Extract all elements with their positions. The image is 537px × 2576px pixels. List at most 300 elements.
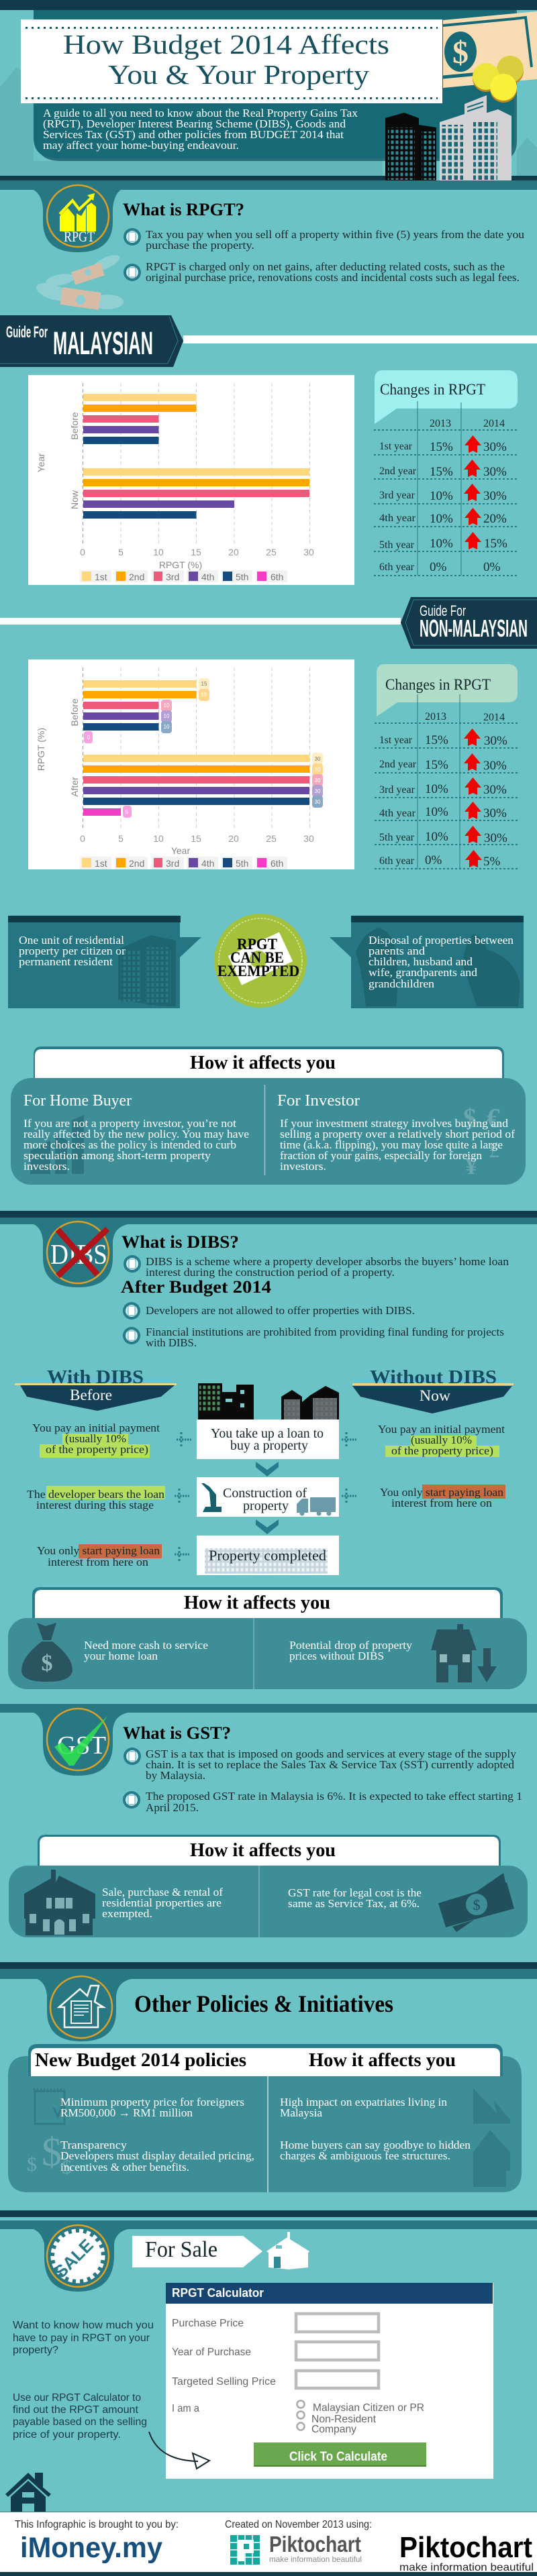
axis labels xyxy=(36,412,314,570)
panel: RPGT calculator: Targeted Selling Price xyxy=(172,2376,276,2387)
panel: how it affects you (GST): How it affects you xyxy=(190,1839,336,1861)
panel: how it affects you (DIBS): prices without DIBS xyxy=(289,1650,384,1662)
table: changes in RPGT (Malaysian): Changes in RPGT xyxy=(380,381,485,398)
panel: RPGT calculator: I am a xyxy=(172,2403,199,2414)
bullet: GST definition: by Malaysia. xyxy=(146,1769,205,1782)
bullet: GST definition: GST is a tax that is imposed on goods and services at every stage of the supply xyxy=(146,1748,517,1760)
title: How Budget 2014 Affects xyxy=(63,29,389,60)
icon: banknotes xyxy=(438,1873,514,1932)
text: developer bears interest xyxy=(27,1486,165,1511)
ribbon: guide for Malaysian: Guide For xyxy=(6,323,48,341)
heading: without DIBS / now: Now xyxy=(420,1387,450,1404)
panel: exemption, family disposal xyxy=(330,916,524,1008)
bullet: net gains: original purchase price, renovations costs and incidental costs such as legal fees. xyxy=(146,271,520,284)
text: investor: selling a property over a relatively short period of xyxy=(280,1128,516,1140)
text: calculator intro: payable based on the selling xyxy=(13,2416,147,2428)
policy rows: Minimum property price for foreigners xyxy=(60,2096,244,2108)
axis labels: 0 xyxy=(80,547,85,557)
axis labels: 5 xyxy=(118,547,124,557)
panel: how it affects you (GST): same as Service Tax, at 6%. xyxy=(288,1897,420,1910)
value tags: before: 10 xyxy=(164,713,170,719)
icon: house with down arrow xyxy=(431,1624,497,1682)
bullet: financial institutions xyxy=(123,1326,504,1349)
axis labels: 15 xyxy=(191,833,201,844)
bullet: net gains: RPGT is charged only on net gains, after deducting related costs, such as the xyxy=(146,260,505,273)
tag: for sale: For Sale xyxy=(145,2237,217,2262)
legend xyxy=(80,857,287,869)
axis labels: Before xyxy=(69,412,80,440)
panel: how it affects you (RPGT): For Investor xyxy=(277,1092,360,1110)
table: changes in RPGT (Malaysian): 15% xyxy=(430,465,453,479)
panel: exemption, family disposal: parents and xyxy=(369,945,426,957)
table: changes in RPGT (non-Malaysian): 10% xyxy=(425,782,448,796)
effect rows: High impact on expatriates living in xyxy=(280,2096,447,2108)
table: changes in RPGT (non-Malaysian): 10% xyxy=(425,805,448,819)
value tags: before: 0 xyxy=(87,735,91,741)
table: changes in RPGT (non-Malaysian): 30% xyxy=(483,806,507,820)
value tags: after xyxy=(123,753,323,818)
value tags: before: 15 xyxy=(201,681,207,687)
panel: RPGT calculator: Purchase Price xyxy=(172,2318,244,2329)
badge: RPGT can be exempted xyxy=(214,914,307,1008)
text: with DIBS initial payment xyxy=(32,1421,160,1458)
badge: DIBS: DIBS xyxy=(50,1240,107,1271)
legend: 4th xyxy=(201,858,214,869)
text: without DIBS start paying: You only start paying loan xyxy=(380,1486,503,1499)
badge: RPGT can be exempted: RPGT xyxy=(237,936,277,953)
panel: how it affects you (GST): Sale, purchase & rental of xyxy=(102,1886,224,1898)
panel: how it affects you (GST): exempted. xyxy=(102,1907,152,1920)
panel: how it affects you (RPGT): £ xyxy=(489,1138,499,1162)
panel: how it affects you (DIBS) xyxy=(8,1587,527,1689)
icon: banknotes: $ xyxy=(473,1896,481,1913)
radio options: Company xyxy=(311,2424,356,2435)
effect rows xyxy=(280,2096,471,2162)
step: take up a loan: You take up a loan to xyxy=(211,1426,324,1441)
text: home buyer: investors. xyxy=(23,1160,70,1173)
text: developer bears interest: The developer bears the loan xyxy=(27,1488,164,1501)
table: changes in RPGT (non-Malaysian): 2nd year xyxy=(379,759,417,770)
text: without DIBS initial payment xyxy=(378,1423,505,1457)
panel: exemption, family disposal: Disposal of properties between xyxy=(369,934,514,947)
illustration: city buildings xyxy=(198,1383,339,1419)
text: calculator intro: property? xyxy=(13,2345,58,2356)
table: changes in RPGT (Malaysian): 10% xyxy=(430,537,453,551)
axis labels: Year xyxy=(171,845,190,856)
table: changes in RPGT (Malaysian) xyxy=(374,370,518,576)
text: home buyer: If you are not a property investor, you’re not xyxy=(23,1117,236,1130)
bars: after xyxy=(83,755,309,816)
heading: what is DIBS: What is DIBS? xyxy=(121,1232,239,1252)
text: home buyer xyxy=(23,1117,249,1173)
bullet: what RPGT is: purchase the property. xyxy=(146,239,254,252)
value tags: after: 30 xyxy=(315,756,321,762)
table: changes in RPGT (Malaysian): 3rd year xyxy=(379,490,416,501)
illustration: black towers xyxy=(385,113,436,180)
policy rows xyxy=(60,2096,254,2174)
ghost icons: $ xyxy=(27,2153,37,2176)
badge: RPGT can be exempted: CAN BE xyxy=(230,949,284,966)
badge: RPGT xyxy=(34,185,121,252)
radio options xyxy=(297,2400,424,2435)
arrows: dotted connectors xyxy=(175,1432,356,1562)
axis labels: 15 xyxy=(191,547,201,557)
intro text: may affect your home-buying endeavour. xyxy=(43,139,239,152)
table: changes in RPGT (Malaysian): 2nd year xyxy=(379,466,417,477)
legend: 2nd xyxy=(129,858,144,869)
table: changes in RPGT (non-Malaysian): 15% xyxy=(425,758,448,772)
step: construction of property xyxy=(197,1477,339,1517)
table: changes in RPGT (non-Malaysian) xyxy=(375,664,519,869)
legend: 1st xyxy=(95,858,107,869)
panel: how it affects you (RPGT): ¥ xyxy=(465,1152,477,1179)
illustration: coins xyxy=(473,56,524,103)
badge: other policies xyxy=(37,1976,131,2041)
legend: 5th xyxy=(236,858,248,869)
panel: how it affects you (DIBS): Potential drop of property xyxy=(289,1639,413,1652)
panel: how it affects you (RPGT) xyxy=(11,1046,526,1185)
icon: house xyxy=(24,1870,95,1935)
text: with DIBS initial payment: of the property price) xyxy=(46,1443,148,1456)
text: without DIBS start paying xyxy=(380,1485,505,1509)
icon: white house xyxy=(266,2232,309,2269)
step: construction of property: property xyxy=(243,1499,289,1513)
table: changes in RPGT (non-Malaysian): 30% xyxy=(484,734,507,748)
panel: how it affects you (RPGT): How it affects you xyxy=(190,1052,336,1073)
bullet: GST rate: April 2015. xyxy=(146,1801,199,1814)
effect rows: Home buyers can say goodbye to hidden xyxy=(280,2139,471,2151)
legend: 4th xyxy=(201,572,214,582)
table: changes in RPGT (non-Malaysian): 0% xyxy=(425,853,442,867)
title card xyxy=(21,19,442,103)
table: changes in RPGT (Malaysian): 2014 xyxy=(483,418,505,429)
table: changes in RPGT (non-Malaysian): 4th year xyxy=(379,808,416,819)
panel: how it affects you (DIBS): Need more cash to service xyxy=(84,1639,208,1652)
text: calculator intro: price of your property. xyxy=(13,2429,121,2440)
bullet: what RPGT is: Tax you pay when you sell off a property within five (5) years from the date you xyxy=(146,228,524,241)
ghost icons xyxy=(27,2088,510,2187)
logo: Piktochart mosaic: Piktochart xyxy=(269,2532,361,2557)
step: take up a loan: buy a property xyxy=(230,1438,308,1453)
table: changes in RPGT (non-Malaysian): 15% xyxy=(425,733,448,747)
text: without DIBS initial payment: (usually 10% xyxy=(411,1434,472,1446)
radio options: Malaysian Citizen or PR xyxy=(313,2402,424,2414)
text: investor: If your investment strategy involves buying and xyxy=(280,1117,509,1130)
title: You & Your Property xyxy=(108,59,370,90)
axis labels: 30 xyxy=(303,833,314,844)
axis labels: 25 xyxy=(266,547,277,557)
badge: sale xyxy=(34,2225,128,2292)
bar chart: non-Malaysian RPGT xyxy=(28,659,354,869)
badge: RPGT: RPGT xyxy=(64,228,95,245)
illustration: flying money xyxy=(34,252,124,310)
table: changes in RPGT (non-Malaysian): 2014 xyxy=(483,712,505,723)
table: changes in RPGT (Malaysian): 30% xyxy=(483,489,507,503)
intro text: Services Tax (GST) and other policies from BUDGET 2014 that xyxy=(43,128,344,141)
illustration: dollar bill xyxy=(443,11,537,88)
value tags: before xyxy=(84,678,209,743)
text: home buyer: more choices as the policy is intended to curb xyxy=(23,1138,236,1151)
panel: how it affects you (GST): GST rate for legal cost is the xyxy=(288,1886,422,1899)
heading: with DIBS / before: Before xyxy=(70,1387,112,1403)
panel: exemption, one residential unit: One unit of residential xyxy=(19,934,124,947)
ribbon: guide for Malaysian xyxy=(0,315,537,367)
value tags: after: 30 xyxy=(315,767,321,773)
axis labels: 10 xyxy=(153,833,164,844)
value tags: after: 30 xyxy=(315,799,321,805)
arrow: step 1 to step 2 xyxy=(256,1462,279,1477)
value tags: after: 30 xyxy=(315,788,321,794)
table: changes in RPGT (Malaysian): 5th year xyxy=(379,539,415,551)
bullet: developers not allowed xyxy=(123,1302,415,1320)
text: investor xyxy=(280,1117,516,1173)
legend: 1st xyxy=(95,572,107,582)
text: without DIBS start paying: interest from here on xyxy=(391,1497,492,1509)
panel: exemption, family disposal: grandchildren xyxy=(369,977,434,990)
bars: now xyxy=(83,468,309,519)
text: with DIBS initial payment: You pay an initial payment xyxy=(32,1421,160,1434)
bullet: financial institutions: with DIBS. xyxy=(146,1336,197,1349)
logo: Piktochart mosaic xyxy=(230,2532,362,2565)
legend: 6th xyxy=(271,858,283,869)
heading: what is GST: What is GST? xyxy=(123,1723,231,1743)
bullet: GST definition: chain. It is set to replace the Sales Tax & Service Tax (SST) currently adopted xyxy=(146,1758,515,1771)
heading: without DIBS / now: Without DIBS xyxy=(370,1366,497,1388)
tag: for sale xyxy=(132,2236,262,2267)
table: changes in RPGT (Malaysian): 30% xyxy=(483,465,507,479)
effect rows: charges & ambiguous fee structures. xyxy=(280,2149,450,2162)
table: changes in RPGT (non-Malaysian): 2013 xyxy=(425,711,446,722)
section band: DIBS xyxy=(0,1211,537,1224)
panel: exemption, one residential unit: permanent resident xyxy=(19,955,113,968)
bullet: net gains xyxy=(124,260,520,284)
panel: how it affects you (RPGT): $ xyxy=(463,1103,477,1133)
button: Click To Calculate xyxy=(289,2450,387,2464)
legend: 5th xyxy=(236,572,248,582)
table: changes in RPGT (Malaysian): 30% xyxy=(483,440,507,454)
text: developer bears interest: interest during this stage xyxy=(36,1499,154,1511)
text: with DIBS start paying: You only start paying loan xyxy=(37,1544,160,1557)
bullet: developers not allowed: Developers are not allowed to offer properties with DIBS. xyxy=(146,1304,415,1317)
legend: 6th xyxy=(271,572,283,582)
text: without DIBS initial payment: of the property price) xyxy=(391,1444,493,1457)
table: changes in RPGT (non-Malaysian): 10% xyxy=(425,830,448,844)
text: with DIBS start paying xyxy=(37,1544,162,1568)
table: changes in RPGT (non-Malaysian): 5% xyxy=(483,855,501,869)
heading: after budget 2014: After Budget 2014 xyxy=(121,1277,271,1297)
icon: money bag: $ xyxy=(42,1651,52,1676)
table: changes in RPGT (non-Malaysian): 30% xyxy=(483,759,507,773)
hero header xyxy=(0,0,537,180)
table: changes in RPGT (Malaysian): 15% xyxy=(484,537,507,551)
panel: RPGT calculator: RPGT Calculator xyxy=(172,2286,264,2300)
step: take up a loan xyxy=(197,1419,339,1459)
legend: 2nd xyxy=(129,572,144,582)
step: construction of property: Construction of xyxy=(223,1486,307,1501)
table: changes in RPGT (non-Malaysian): 6th year xyxy=(379,855,415,867)
table: changes in RPGT (Malaysian): 4th year xyxy=(379,513,416,524)
axis labels: 10 xyxy=(153,547,164,557)
step: property completed: Property completed xyxy=(209,1547,326,1564)
panel: new budget policies: New Budget 2014 policies xyxy=(35,2049,246,2071)
table: changes in RPGT (non-Malaysian): 1st year xyxy=(379,735,413,746)
footer xyxy=(0,2512,537,2576)
axis labels: Year xyxy=(36,453,46,472)
panel: exemption, family disposal: wife, grandparents and xyxy=(369,966,478,979)
logo: Piktochart wordmark: make information beautiful xyxy=(399,2562,534,2573)
text: home buyer: really affected by the new policy. You may have xyxy=(23,1128,249,1140)
value tags: before: 10 xyxy=(164,702,170,708)
panel: how it affects you (RPGT): For Home Buyer xyxy=(23,1092,132,1110)
table: changes in RPGT (non-Malaysian): 30% xyxy=(483,783,507,797)
section band: for sale xyxy=(0,2210,537,2229)
bullet: DIBS definition: interest during the construction period of a property. xyxy=(146,1266,395,1279)
axis labels: RPGT (%) xyxy=(159,559,202,570)
bullet: GST rate: The proposed GST rate in Malaysia is 6%. It is expected to take effect starting 1 xyxy=(146,1790,522,1803)
bars: before xyxy=(83,394,196,444)
text: calculator intro: Use our RPGT Calculator to xyxy=(13,2392,141,2404)
badge: sale: SALE xyxy=(50,2235,97,2282)
text: calculator intro: have to pay in RPGT on your xyxy=(13,2332,150,2344)
badge: DIBS xyxy=(34,1222,128,1287)
table: changes in RPGT (Malaysian): 20% xyxy=(483,512,507,526)
text: investor: time (a.k.a. flipping), you may lose quite a large xyxy=(280,1138,503,1151)
bars: before xyxy=(83,680,196,731)
axis labels: 30 xyxy=(303,547,314,557)
heading: with DIBS / before xyxy=(15,1366,177,1411)
button xyxy=(254,2443,426,2467)
panel: RPGT calculator: Year of Purchase xyxy=(172,2347,251,2358)
icon: money bag xyxy=(21,1623,72,1682)
value tags: before: 10 xyxy=(164,724,170,730)
panel: exemption, one residential unit xyxy=(8,916,201,1008)
table: changes in RPGT (Malaysian): 10% xyxy=(430,512,453,526)
panel: how it affects you (GST) xyxy=(9,1835,528,1937)
heading: with DIBS / before: With DIBS xyxy=(47,1366,144,1388)
axis labels: RPGT (%) xyxy=(36,728,46,771)
heading: what is RPGT: What is RPGT? xyxy=(123,200,244,219)
text: with DIBS start paying: interest from here on xyxy=(48,1556,148,1568)
panel: how it affects you (DIBS): your home loan xyxy=(84,1650,158,1662)
legend xyxy=(80,570,287,582)
intro text xyxy=(43,107,358,152)
logo: iMoney.my: iMoney.my xyxy=(20,2532,162,2564)
table: changes in RPGT (Malaysian): 10% xyxy=(430,489,453,503)
text: calculator intro: Want to know how much you xyxy=(13,2320,154,2331)
panel: how it affects you (GST): residential properties are xyxy=(102,1896,222,1909)
axis labels: 5 xyxy=(118,833,124,844)
text: investor: investors. xyxy=(280,1160,326,1173)
intro text: (RPGT), Developer Interest Bearing Scheme (DIBS), Goods and xyxy=(43,117,346,130)
bullet: GST rate xyxy=(123,1790,522,1814)
section band: RPGT xyxy=(0,176,537,190)
panel: exemption, family disposal: children, husband and xyxy=(369,955,473,968)
arrow: to calculator xyxy=(149,2432,209,2469)
panel: how it affects you (DIBS): How it affects you xyxy=(184,1592,330,1613)
badge: RPGT can be exempted: EXEMPTED xyxy=(217,963,299,979)
policy rows: RM500,000 → RM1 million xyxy=(60,2106,193,2119)
policy rows: Developers must display detailed pricing, xyxy=(60,2149,254,2162)
section band: GST xyxy=(0,1704,537,1713)
table: changes in RPGT (Malaysian): 2013 xyxy=(430,418,451,429)
step: property completed xyxy=(197,1536,339,1575)
logo: Piktochart mosaic: make information beautiful xyxy=(269,2555,362,2564)
legend: 3rd xyxy=(166,858,179,869)
badge: GST: GST xyxy=(57,1731,106,1760)
value tags: after: 30 xyxy=(315,777,321,784)
policy rows: incentives & other benefits. xyxy=(60,2161,189,2174)
input fields xyxy=(296,2314,379,2388)
axis labels: 0 xyxy=(80,833,85,844)
text: with DIBS initial payment: (usually 10% xyxy=(65,1432,126,1445)
effect rows: Malaysia xyxy=(280,2106,323,2119)
axis labels: After xyxy=(69,777,80,797)
icon: dark house xyxy=(5,2473,51,2512)
table: changes in RPGT (non-Malaysian): 3rd year xyxy=(379,784,416,796)
panel: how it affects you (RPGT): € xyxy=(487,1103,500,1133)
table: changes in RPGT (non-Malaysian): Changes in RPGT xyxy=(385,676,491,693)
panel: new budget policies: How it affects you xyxy=(309,2049,456,2071)
bullet: financial institutions: Financial institutions are prohibited from providing final funding for projects xyxy=(146,1326,504,1338)
bullet: what RPGT is xyxy=(124,228,524,252)
axis labels: 20 xyxy=(228,547,239,557)
table: changes in RPGT (non-Malaysian): 30% xyxy=(484,831,507,845)
badge: GST xyxy=(34,1709,128,1776)
text: investor: fraction of your gains, especially for foreign xyxy=(280,1149,482,1162)
ribbon: guide for non-Malaysian xyxy=(0,597,537,649)
panel: RPGT calculator xyxy=(166,2283,493,2479)
axis labels xyxy=(36,698,314,856)
section band: other policies xyxy=(0,1962,537,1979)
value tags: before: 15 xyxy=(201,692,207,698)
ribbon: guide for Malaysian: MALAYSIAN xyxy=(53,326,153,362)
table: changes in RPGT (Malaysian): 1st year xyxy=(379,441,413,452)
heading: other policies and initiatives: Other Policies & Initiatives xyxy=(134,1990,393,2017)
value tags: after: 5 xyxy=(126,809,129,815)
axis labels: Now xyxy=(69,490,80,509)
legend: 3rd xyxy=(166,572,179,582)
axis labels: 20 xyxy=(228,833,239,844)
text: calculator intro: find out the RPGT amount xyxy=(13,2404,139,2416)
bullet: GST definition xyxy=(124,1748,517,1782)
ghost icons: $ xyxy=(62,2156,72,2178)
table: changes in RPGT (non-Malaysian): 5th year xyxy=(379,832,415,843)
policy rows: Transparency xyxy=(60,2139,128,2151)
axis labels: 25 xyxy=(266,833,277,844)
table: changes in RPGT (Malaysian): 6th year xyxy=(379,561,415,573)
bullet: DIBS definition: DIBS is a scheme where a property developer absorbs the buyers’ home loan xyxy=(146,1255,509,1268)
text: calculator intro xyxy=(13,2320,154,2440)
heading: without DIBS / now xyxy=(352,1366,514,1413)
bar chart: Malaysian RPGT xyxy=(28,375,354,585)
footer: This Infographic is brought to you by: xyxy=(15,2519,179,2530)
bullet: DIBS definition xyxy=(124,1255,509,1279)
intro text: A guide to all you need to know about the Real Property Gains Tax xyxy=(43,107,358,119)
table: changes in RPGT (Malaysian): 0% xyxy=(430,560,447,574)
panel: exemption, one residential unit: property per citizen or xyxy=(19,945,126,957)
arrow: step 2 to step 3 xyxy=(256,1519,279,1534)
footer: Created on November 2013 using: xyxy=(225,2519,372,2530)
text: home buyer: speculation among short-term property xyxy=(23,1149,211,1162)
table: changes in RPGT (Malaysian): 0% xyxy=(483,560,501,574)
axis labels: Before xyxy=(69,698,80,727)
radio options: Non-Resident xyxy=(311,2414,377,2425)
title xyxy=(63,29,389,90)
text: without DIBS initial payment: You pay an initial payment xyxy=(378,1423,505,1436)
ribbon: guide for non-Malaysian: Guide For xyxy=(420,602,466,619)
ghost icons: $ xyxy=(42,2130,62,2174)
table: changes in RPGT (Malaysian): 15% xyxy=(430,440,453,454)
